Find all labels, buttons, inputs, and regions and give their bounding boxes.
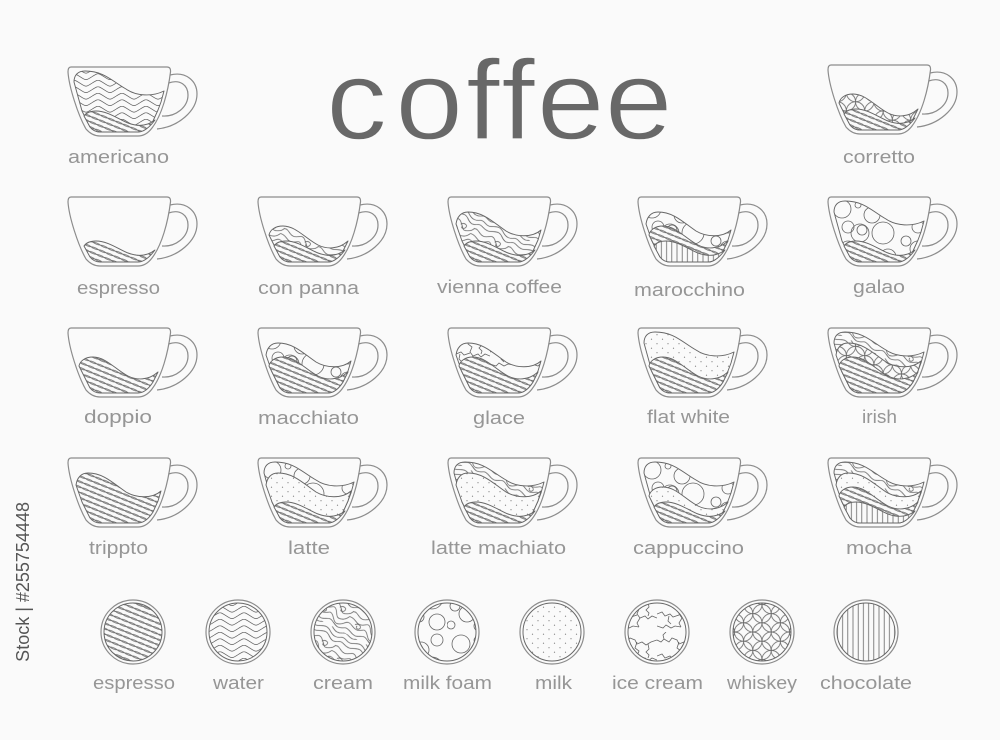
cup: macchiato: macchiato — [258, 408, 359, 428]
legend: chocolate — [820, 600, 912, 693]
legend: milk foam — [403, 600, 492, 693]
legend: milk — [520, 600, 584, 693]
cup: espresso — [68, 197, 197, 298]
cup: galao — [828, 197, 957, 297]
cup: con panna — [258, 197, 387, 298]
cup: irish — [828, 328, 957, 427]
legend: ice cream — [612, 600, 703, 693]
cup: galao: galao — [853, 277, 905, 297]
cup: latte machiato: latte machiato — [431, 538, 566, 558]
legend: ice cream: ice cream — [612, 673, 703, 693]
cup: mocha: mocha — [846, 538, 913, 558]
cup: mocha — [828, 458, 957, 558]
cup: latte: latte — [288, 538, 330, 558]
cup: doppio — [68, 328, 197, 427]
cup: trippto — [68, 458, 197, 558]
cup: vienna coffee: vienna coffee — [437, 277, 562, 297]
legend: espresso — [93, 600, 175, 693]
cup: glace: glace — [473, 408, 525, 428]
legend: espresso: espresso — [93, 673, 175, 693]
cup: marocchino — [634, 197, 767, 300]
cup: vienna coffee — [437, 197, 577, 297]
stock id text: Stock | #255754448 — [13, 502, 33, 662]
cup: corretto: corretto — [843, 147, 915, 167]
legend: whiskey: whiskey — [726, 673, 797, 693]
cup: flat white: flat white — [647, 407, 730, 427]
cup: cappuccino — [633, 458, 767, 558]
cup: flat white — [638, 328, 767, 427]
legend: whiskey — [726, 600, 797, 693]
cup: latte — [258, 458, 387, 558]
cup: americano: americano — [68, 147, 169, 167]
cup: glace — [448, 328, 577, 428]
cup: cappuccino: cappuccino — [633, 538, 744, 558]
legend: milk: milk — [535, 673, 573, 693]
legend: cream — [311, 600, 375, 693]
cup: irish: irish — [862, 407, 897, 427]
cup: doppio: doppio — [84, 407, 152, 427]
title: coffee — [326, 37, 673, 163]
legend: cream: cream — [313, 673, 373, 693]
cup: trippto: trippto — [89, 538, 148, 558]
cup: latte machiato — [431, 458, 577, 558]
cup: americano — [68, 67, 197, 167]
cup: con panna: con panna — [258, 278, 360, 298]
legend: chocolate: chocolate — [820, 673, 912, 693]
legend: milk foam: milk foam — [403, 673, 492, 693]
cup: marocchino: marocchino — [634, 280, 745, 300]
cup: corretto — [828, 65, 957, 167]
legend: water: water — [212, 673, 264, 693]
cup: macchiato — [258, 328, 387, 428]
cup: espresso: espresso — [77, 278, 160, 298]
legend: water — [206, 600, 270, 693]
